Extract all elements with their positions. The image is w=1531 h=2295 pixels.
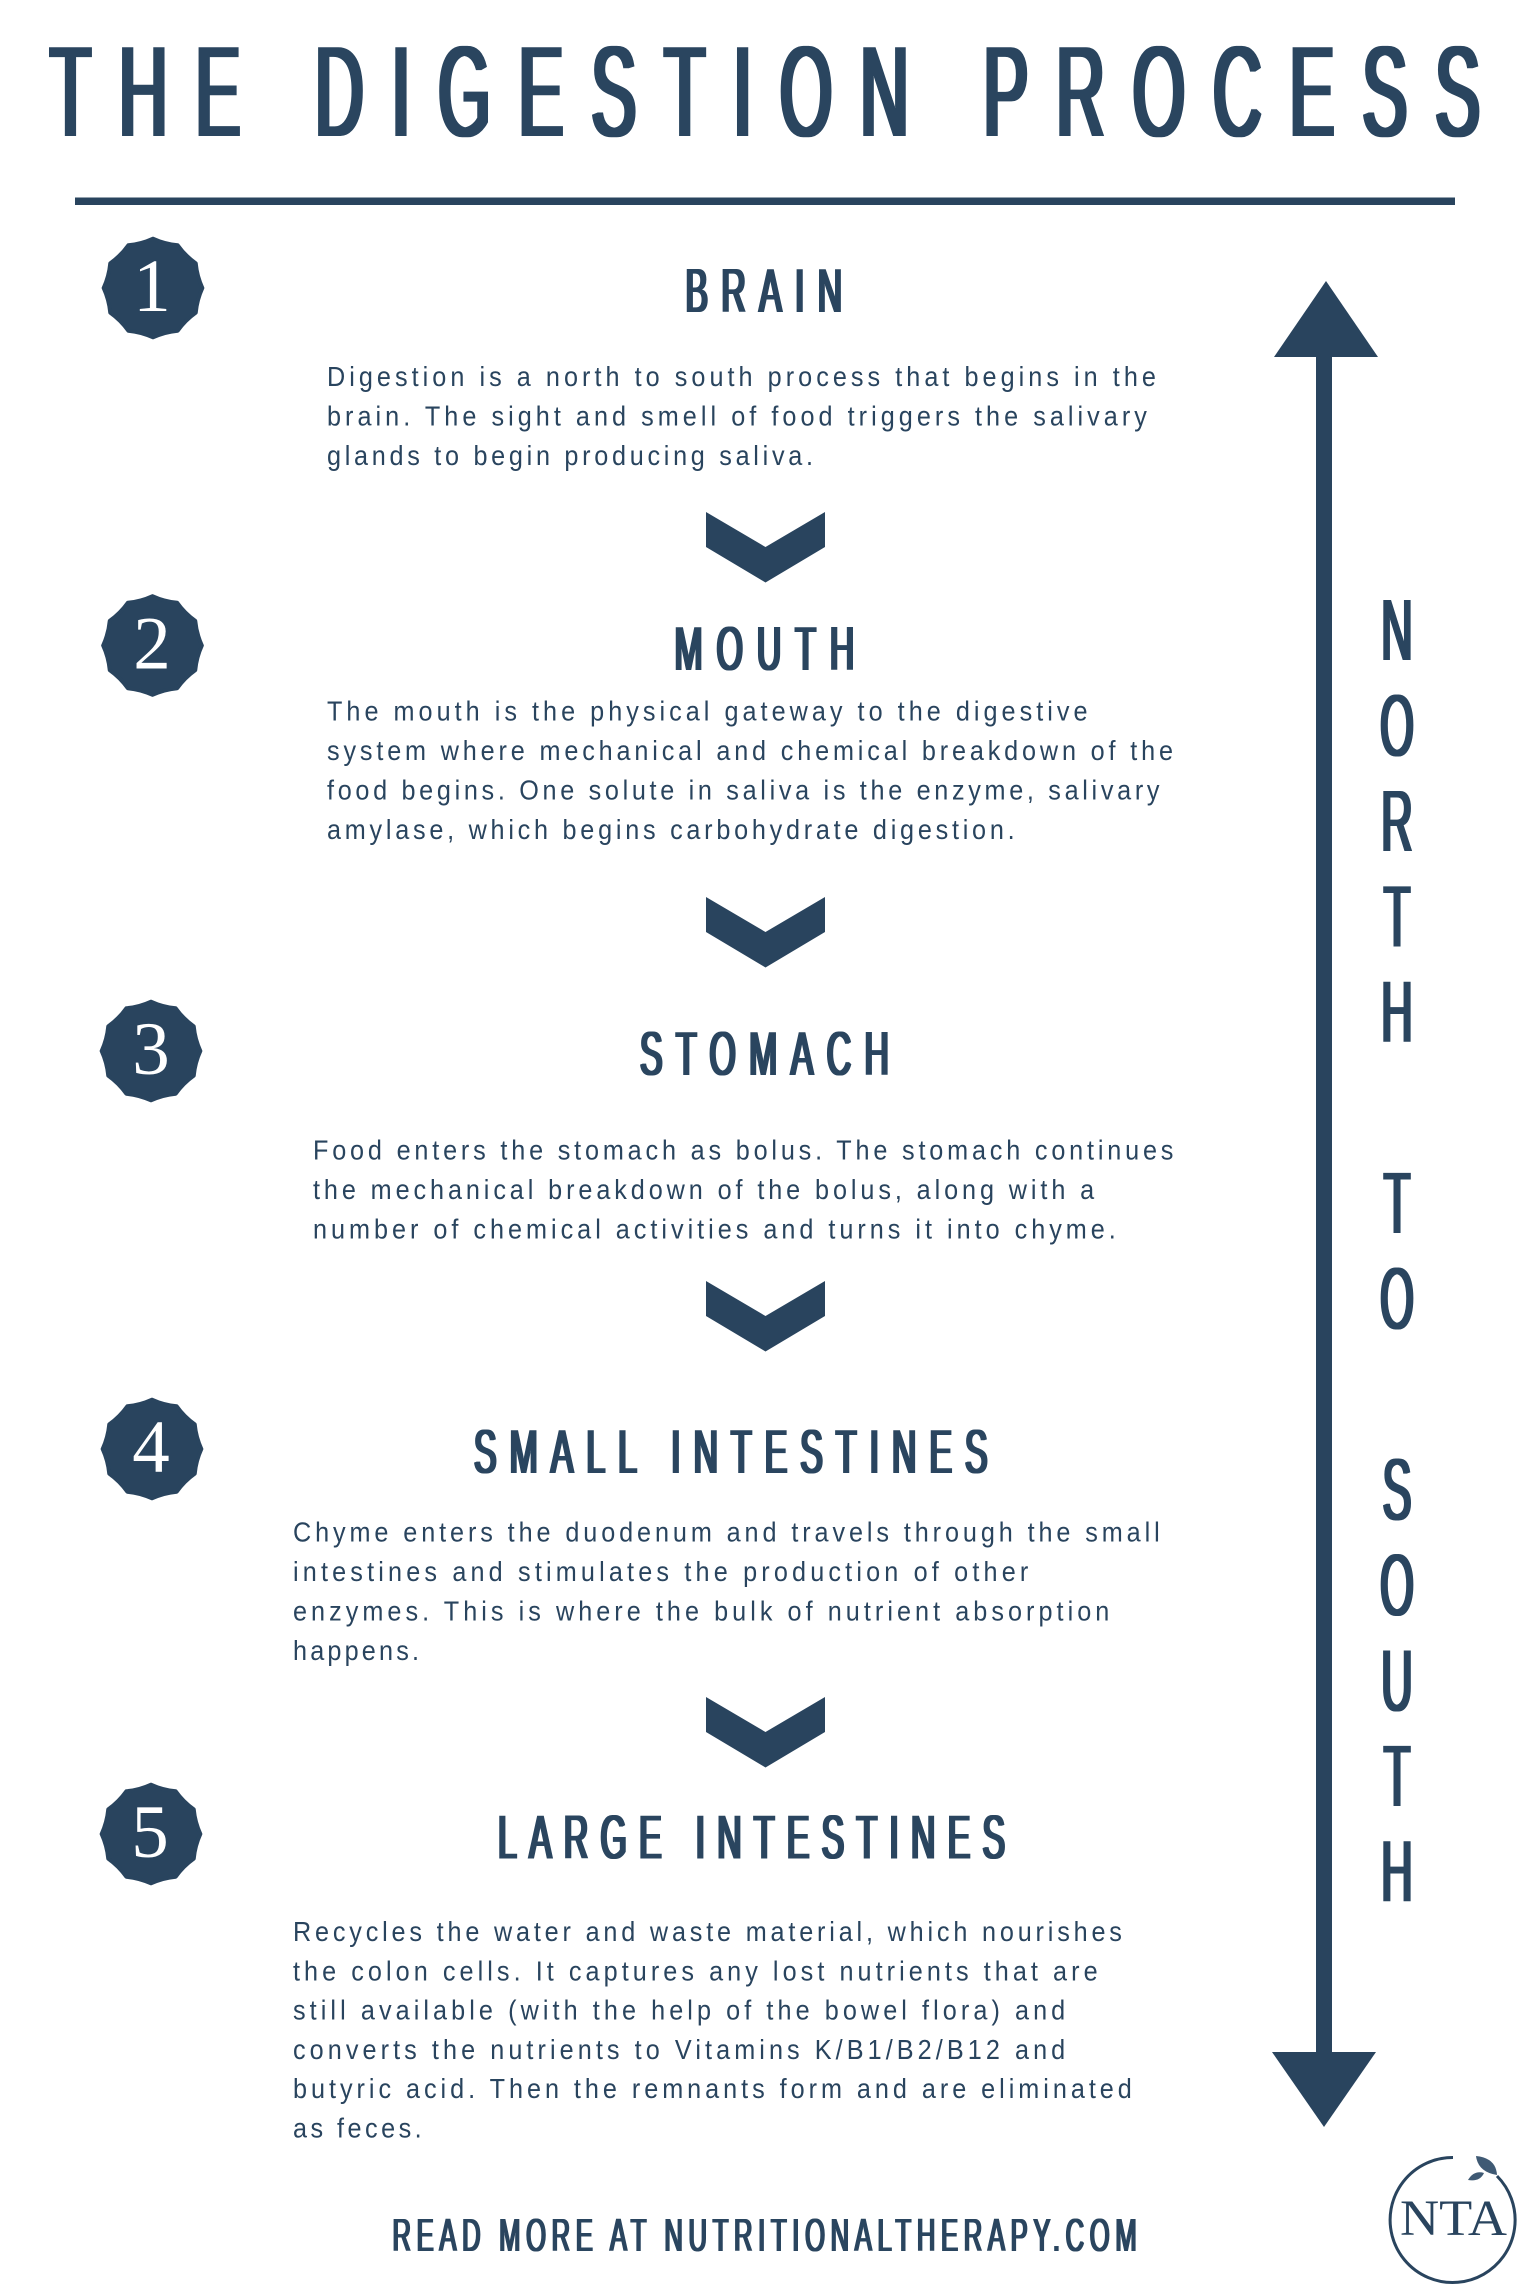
text: large intestines description: converts the nutrients to Vitamins K/B1/B2/B12 and xyxy=(293,2034,1065,2065)
vertical label: north to south: N xyxy=(1381,582,1413,679)
text: mouth description: system where mechanical and chemical breakdown of the xyxy=(327,735,1173,766)
text: large intestines description xyxy=(293,1916,1132,2144)
badge 3: 3 xyxy=(132,1008,170,1091)
chevron 1 xyxy=(706,512,825,582)
text: brain description xyxy=(327,361,1156,471)
chevron 4 xyxy=(706,1697,825,1768)
text: small intestines description: intestines and stimulates the production of other xyxy=(293,1556,1028,1588)
vertical label: north to south: T xyxy=(1384,1155,1410,1252)
text: mouth description: amylase, which begins carbohydrate digestion. xyxy=(327,814,1015,845)
text: brain description: Digestion is a north to south process that begins in the xyxy=(327,361,1156,392)
text: large intestines description: butyric acid. Then the remnants form and are eliminated xyxy=(293,2073,1132,2105)
text: brain description: brain. The sight and smell of food triggers the salivary xyxy=(327,400,1148,432)
panel: step 4 small intestines xyxy=(103,1400,1160,1667)
chevron 3 xyxy=(706,1281,825,1352)
vertical label: north to south: H xyxy=(1381,964,1413,1061)
badge 5: 5 xyxy=(131,1791,169,1874)
title rule xyxy=(75,198,1455,205)
vertical label: north to south: U xyxy=(1381,1632,1413,1729)
badge 4: 4 xyxy=(132,1406,170,1489)
heading: brain: BRAIN xyxy=(686,256,842,326)
badge 5 xyxy=(102,1785,200,1883)
text: mouth description: The mouth is the physical gateway to the digestive xyxy=(327,695,1088,727)
vertical label: north to south xyxy=(1380,582,1414,1920)
heading: stomach: STOMACH xyxy=(640,1019,889,1089)
text: small intestines description: happens. xyxy=(293,1635,419,1667)
text: stomach description: the mechanical breakdown of the bolus, along with a xyxy=(313,1174,1094,1205)
vertical label: north to south: O xyxy=(1380,677,1414,774)
text: stomach description xyxy=(313,1134,1173,1245)
badge 1 xyxy=(104,239,202,337)
text: large intestines description: as feces. xyxy=(293,2112,422,2144)
text: large intestines description: Recycles the water and waste material, which nourishes xyxy=(293,1916,1122,1947)
vertical label: north to south: O xyxy=(1380,1250,1414,1347)
text: large intestines description: the colon cells. It captures any lost nutrients that are xyxy=(293,1955,1098,1987)
panel: step 1 brain xyxy=(104,239,1156,471)
vertical label: north to south: T xyxy=(1384,868,1410,965)
text: mouth description: food begins. One solute in saliva is the enzyme, salivary xyxy=(327,774,1160,806)
badge 4 xyxy=(103,1400,201,1498)
text: stomach description: number of chemical activities and turns it into chyme. xyxy=(313,1213,1116,1245)
badge 2: 2 xyxy=(133,602,171,686)
text: mouth description xyxy=(327,695,1173,845)
north to south double arrow xyxy=(1272,281,1378,2127)
icon: NTA logo: NTA xyxy=(1400,2191,1507,2247)
vertical label: north to south: H xyxy=(1381,1823,1413,1920)
badge 3 xyxy=(102,1002,200,1100)
vertical label: north to south: O xyxy=(1380,1537,1414,1634)
text: small intestines description: enzymes. This is where the bulk of nutrient absorption xyxy=(293,1595,1109,1627)
badge 1: 1 xyxy=(133,245,171,328)
panel: step 5 large intestines xyxy=(102,1785,1132,2144)
chevron 2 xyxy=(706,897,825,968)
heading: small intestines: SMALL INTESTINES xyxy=(474,1417,988,1487)
icon: NTA logo xyxy=(1390,2156,1515,2282)
vertical label: north to south: T xyxy=(1384,1728,1410,1825)
heading: mouth: MOUTH xyxy=(674,614,854,684)
text: small intestines description xyxy=(293,1516,1160,1667)
title: THE DIGESTION PROCESS xyxy=(50,19,1480,164)
vertical label: north to south: R xyxy=(1381,773,1413,870)
badge 2 xyxy=(103,596,202,695)
panel: step 3 stomach xyxy=(102,1002,1173,1245)
text: brain description: glands to begin producing saliva. xyxy=(327,440,813,471)
footer call to action: READ MORE AT NUTRITIONALTHERAPY.COM xyxy=(392,2209,1137,2261)
text: large intestines description: still available (with the help of the bowel flora) and xyxy=(293,1994,1065,2026)
text: stomach description: Food enters the stomach as bolus. The stomach continues xyxy=(313,1134,1173,1166)
panel: step 2 mouth xyxy=(103,596,1173,845)
heading: large intestines: LARGE INTESTINES xyxy=(498,1803,1005,1872)
text: small intestines description: Chyme enters the duodenum and travels through the small xyxy=(293,1516,1160,1548)
vertical label: north to south: S xyxy=(1382,1441,1412,1538)
